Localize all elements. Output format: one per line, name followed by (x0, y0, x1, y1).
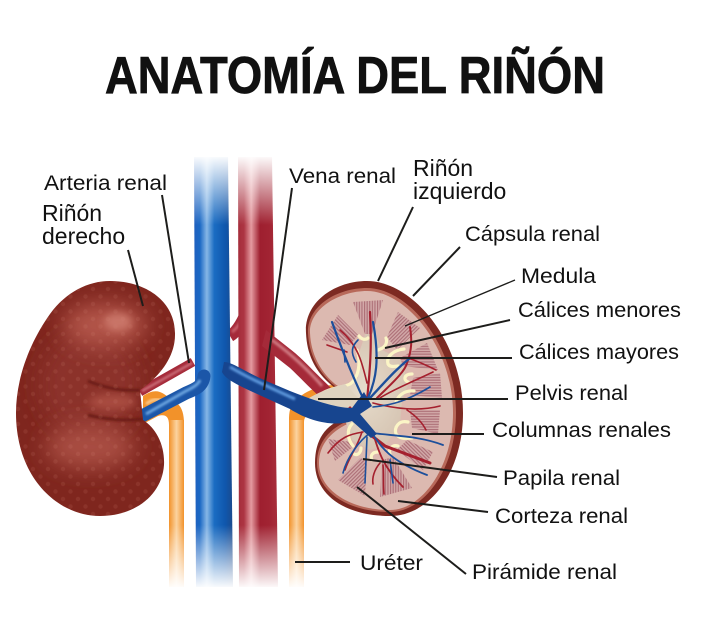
label: Riñón izquierdo: Riñón (413, 155, 473, 181)
renal pelvis (306, 384, 360, 416)
label: Papila renal: Papila renal (503, 467, 620, 490)
label: Pelvis renal: Pelvis renal (515, 382, 628, 405)
left ureter (143, 391, 185, 589)
label: Vena renal: Vena renal (289, 165, 396, 188)
vena cava (190, 155, 238, 589)
capsule (306, 281, 463, 516)
label: Uréter: Uréter (360, 552, 423, 575)
label: Cálices menores: Cálices menores (518, 299, 681, 322)
label: Cálices mayores: Cálices mayores (519, 341, 679, 364)
label: Columnas renales: Columnas renales (492, 419, 671, 442)
medulla centre (320, 332, 408, 450)
calyces (318, 336, 414, 460)
renal artery branches (327, 312, 440, 494)
right kidney (222, 281, 463, 516)
label: Cápsula renal: Cápsula renal (465, 223, 600, 246)
pyramids (322, 300, 442, 497)
right ureter (288, 385, 340, 589)
leader lines (128, 188, 515, 574)
capsule inner ring (308, 288, 456, 512)
renal vein branches (332, 322, 443, 483)
label: Pirámide renal: Pirámide renal (472, 561, 617, 584)
label: Corteza renal: Corteza renal (495, 505, 628, 528)
label: Riñón derecho: derecho (42, 223, 125, 249)
label: Riñón izquierdo: izquierdo (413, 178, 506, 204)
cortex (310, 291, 453, 510)
aorta (230, 155, 354, 589)
label: Medula: Medula (521, 265, 596, 288)
main renal vein (222, 362, 377, 438)
title: ANATOMÍA DEL RIÑÓN (105, 46, 605, 105)
left kidney (16, 281, 176, 516)
left renal vein (142, 376, 204, 416)
right renal artery (262, 330, 354, 416)
label: Riñón derecho: Riñón (42, 200, 102, 226)
label: Arteria renal: Arteria renal (44, 172, 167, 195)
left renal artery (140, 362, 193, 392)
